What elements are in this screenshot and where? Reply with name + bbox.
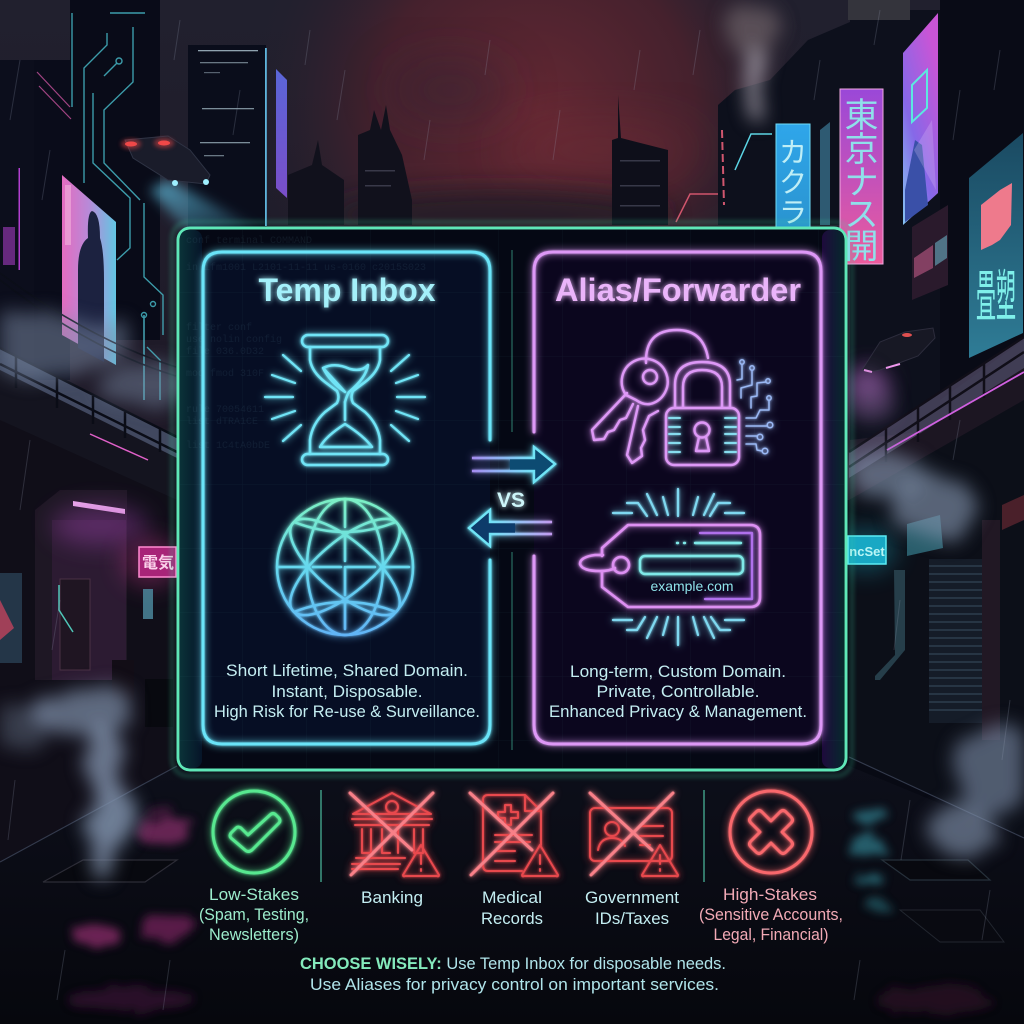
icon: email alias tag (580, 489, 760, 645)
label: low stakes: Low-Stakes (209, 886, 299, 904)
icon: hourglass (265, 335, 425, 465)
right street wall with shutter (836, 400, 1024, 838)
label: high stakes: (Sensitive Accounts, (699, 906, 843, 924)
flying car right (848, 328, 935, 403)
label: medical records (481, 888, 543, 928)
closing advice: CHOOSE WISELY: Use Temp Inbox for disposable needs. (300, 954, 726, 973)
icon: low stakes check (213, 791, 295, 873)
vertical blue sign: ラ (779, 197, 807, 228)
label: government ids: Government (585, 888, 679, 907)
power wires (0, 273, 176, 376)
faint terminal text: use nolin config (186, 334, 282, 346)
circuit neon lines (72, 13, 163, 400)
flying car left (121, 136, 270, 235)
label: low stakes (199, 886, 309, 944)
faint terminal text: conf terminal COMMAND (186, 235, 312, 247)
icon: globe with shared network (277, 499, 413, 635)
right buildings (718, 0, 1024, 440)
teal billboard: 畳塑 (976, 265, 1016, 328)
label: vs: VS (497, 489, 525, 512)
label: medical records: Records (481, 909, 543, 928)
left panel frame (203, 252, 490, 744)
right panel description: Private, Controllable. (596, 682, 760, 701)
icon: banking crossed out (350, 793, 439, 876)
vertical blue sign: ク (779, 167, 807, 198)
right panel frame (534, 252, 821, 744)
divider left (320, 790, 322, 882)
faint terminal text (186, 235, 426, 452)
right panel description (549, 662, 807, 721)
vertical pink sign (840, 89, 883, 266)
panel: alias forwarder (534, 252, 821, 744)
faint terminal text: list dTRA1CE (186, 416, 258, 428)
label: banking: Banking (361, 888, 423, 907)
vertical pink sign: 京 (844, 131, 878, 169)
faint terminal text: rule 70054611 (186, 404, 264, 416)
icon: medical records crossed out (470, 793, 558, 876)
heading: alias forwarder: Alias/Forwarder (555, 272, 801, 308)
left street wall with door (0, 420, 178, 862)
right panel description: Long-term, Custom Domain. (570, 662, 786, 681)
left pink billboard with hooded figure (62, 175, 116, 365)
right panel description: Enhanced Privacy & Management. (549, 702, 807, 721)
domain label: example.com (650, 578, 734, 594)
right overpass with railing (849, 337, 1024, 510)
label: government ids: IDs/Taxes (595, 909, 669, 928)
left panel description: Short Lifetime, Shared Domain. (226, 661, 468, 680)
left overpass with railing (0, 348, 177, 505)
distant city skyline (288, 95, 718, 225)
wet street (0, 757, 1024, 1024)
label: government ids (585, 888, 679, 928)
vertical pink sign: 開 (844, 228, 878, 266)
vertical pink sign: 東 (844, 97, 878, 135)
divider right (703, 790, 705, 882)
left panel description: Instant, Disposable. (272, 682, 422, 701)
closing advice: Use Aliases for privacy control on important services. (310, 975, 719, 994)
purple billboard (903, 13, 938, 225)
arrow: right (472, 447, 555, 482)
vertical pink sign: ス (844, 196, 878, 234)
label: low stakes: (Spam, Testing, (199, 906, 309, 924)
vs badge with arrows (469, 447, 555, 546)
stakes row (199, 790, 843, 944)
vertical blue sign: カ (779, 137, 807, 168)
vertical pink sign: ナ (844, 164, 878, 202)
faint terminal text: mod fmod 310F (186, 368, 264, 380)
alias input field (640, 543, 743, 574)
arrow: left (469, 510, 552, 546)
left panel description: High Risk for Re-use & Surveillance. (214, 702, 480, 721)
icon: keys and padlock (592, 330, 773, 465)
label: low stakes: Newsletters) (209, 926, 299, 944)
panel: temp inbox (203, 252, 490, 744)
closing advice (300, 954, 726, 994)
right street wall with shutter: ncSet (849, 544, 885, 559)
street grates (43, 860, 1004, 942)
tag rays (613, 489, 744, 645)
tag outline (580, 525, 760, 607)
label: high stakes: Legal, Financial) (714, 926, 828, 944)
label: medical records: Medical (482, 888, 542, 907)
background: stormy sky (0, 0, 1024, 500)
label: high stakes: High-Stakes (723, 886, 817, 904)
icon: high stakes x (730, 791, 812, 873)
vertical blue sign (776, 124, 810, 228)
main comparison panel (172, 222, 852, 776)
faint terminal text: filter conf (186, 322, 252, 334)
faint terminal text: list 1C4tA0bDE (186, 440, 270, 452)
icon: government ids crossed out (590, 793, 678, 876)
pink accent lines and magenta glyph sign (3, 72, 71, 270)
faint terminal text: file 036.0D32 (186, 346, 264, 358)
teal billboard (969, 133, 1023, 358)
label: high stakes (699, 886, 843, 944)
left tower with side billboard (0, 0, 287, 380)
heading: temp inbox: Temp Inbox (258, 272, 436, 308)
left street wall with door: 電気 (142, 553, 174, 572)
left panel description (214, 661, 480, 721)
center divider (511, 250, 513, 750)
faint terminal text: in ifm1001 L2101-11-11 us-0160 c2015S023 (186, 262, 426, 274)
